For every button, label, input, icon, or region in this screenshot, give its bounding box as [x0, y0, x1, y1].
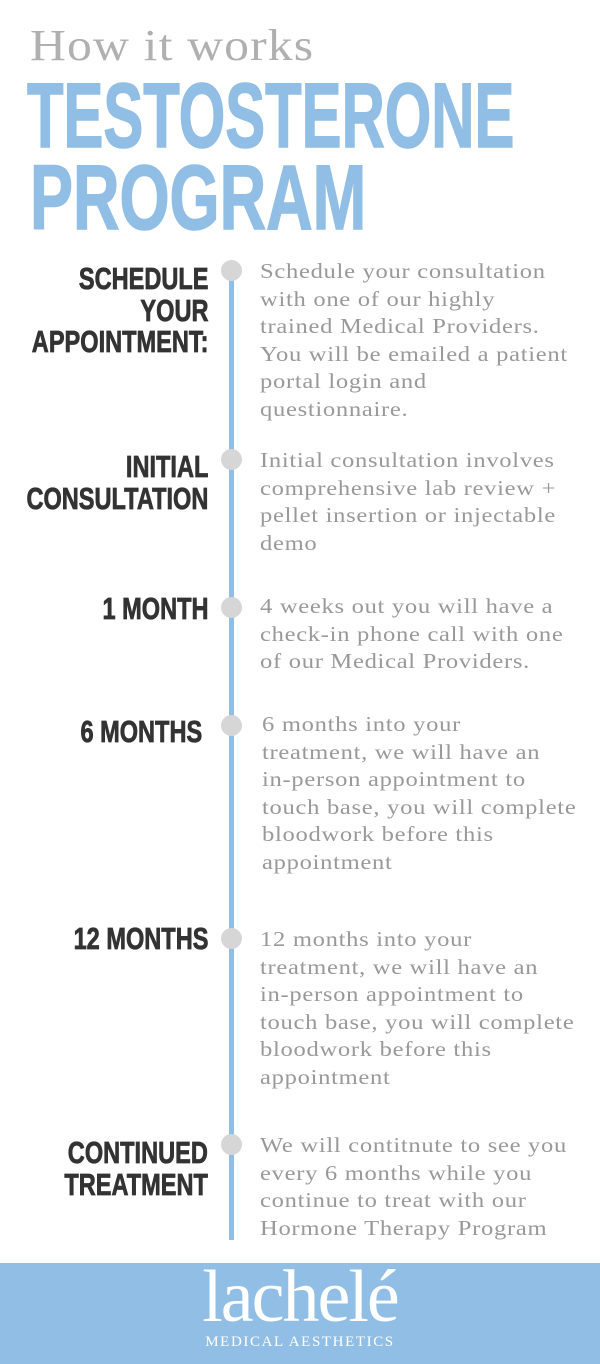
dot	[221, 715, 242, 736]
step: continued treatment	[64, 1133, 567, 1240]
description: with one of our highly	[260, 287, 495, 311]
step: 12 months	[73, 921, 574, 1089]
description: 4 weeks out you will have a	[260, 594, 553, 618]
description: Initial consultation involves	[260, 448, 555, 472]
step: 1 month	[102, 591, 563, 673]
dot	[221, 449, 242, 470]
label: APPOINTMENT:	[31, 324, 208, 359]
description: bloodwork before this	[262, 822, 494, 846]
label: 12 MONTHS	[73, 921, 208, 956]
description: of our Medical Providers.	[260, 649, 530, 673]
description: demo	[260, 531, 317, 555]
label	[26, 449, 208, 516]
timeline line	[229, 270, 234, 1240]
label: CONTINUED	[68, 1135, 208, 1170]
label: TREATMENT	[64, 1166, 208, 1202]
description	[260, 448, 556, 555]
step: schedule	[31, 259, 568, 421]
description: Hormone Therapy Program	[260, 1216, 547, 1240]
description: comprehensive lab review +	[260, 476, 556, 500]
description	[260, 594, 563, 673]
label: INITIAL	[126, 449, 208, 484]
description: in-person appointment to	[262, 767, 526, 791]
dot	[221, 928, 242, 949]
subtitle: How it works: How it works	[30, 21, 314, 70]
description: pellet insertion or injectable	[260, 503, 556, 527]
description: Schedule your consultation	[260, 259, 546, 283]
description: 6 months into your	[262, 712, 461, 736]
description: trained Medical Providers.	[260, 314, 540, 338]
description: appointment	[262, 850, 393, 874]
description: You will be emailed a patient	[260, 342, 568, 366]
description	[260, 1133, 567, 1240]
description: We will contitnute to see you	[260, 1133, 567, 1157]
logo: lachelé: lachelé	[202, 1256, 398, 1338]
step: initial consultation	[26, 448, 556, 555]
description: portal login and	[260, 369, 427, 393]
description	[260, 927, 574, 1089]
footer	[0, 1263, 600, 1364]
description: treatment, we will have an	[260, 955, 538, 979]
description: check-in phone call with one	[260, 622, 563, 646]
logo subtitle: MEDICAL AESTHETICS	[205, 1334, 395, 1350]
description: appointment	[260, 1065, 391, 1089]
label: 1 MONTH	[102, 591, 208, 626]
step: 6 months	[80, 712, 576, 874]
label: CONSULTATION	[26, 480, 208, 516]
dot	[221, 260, 242, 281]
label: YOUR	[140, 292, 208, 328]
dot	[221, 1134, 242, 1155]
description: bloodwork before this	[260, 1037, 492, 1061]
description: continue to treat with our	[260, 1188, 527, 1212]
description	[262, 712, 576, 874]
label	[31, 261, 208, 359]
title: TESTOSTERONE: TESTOSTERONE	[27, 65, 514, 167]
label: 6 MONTHS	[80, 714, 202, 749]
description: treatment, we will have an	[262, 740, 540, 764]
label: SCHEDULE	[78, 261, 208, 296]
description: every 6 months while you	[260, 1161, 532, 1185]
description: touch base, you will complete	[262, 795, 576, 819]
description	[260, 259, 568, 421]
description: questionnaire.	[260, 397, 408, 421]
label	[64, 1135, 208, 1202]
dot	[221, 597, 242, 618]
description: in-person appointment to	[260, 982, 524, 1006]
title: PROGRAM: PROGRAM	[30, 147, 366, 249]
description: 12 months into your	[260, 927, 472, 951]
description: touch base, you will complete	[260, 1010, 574, 1034]
